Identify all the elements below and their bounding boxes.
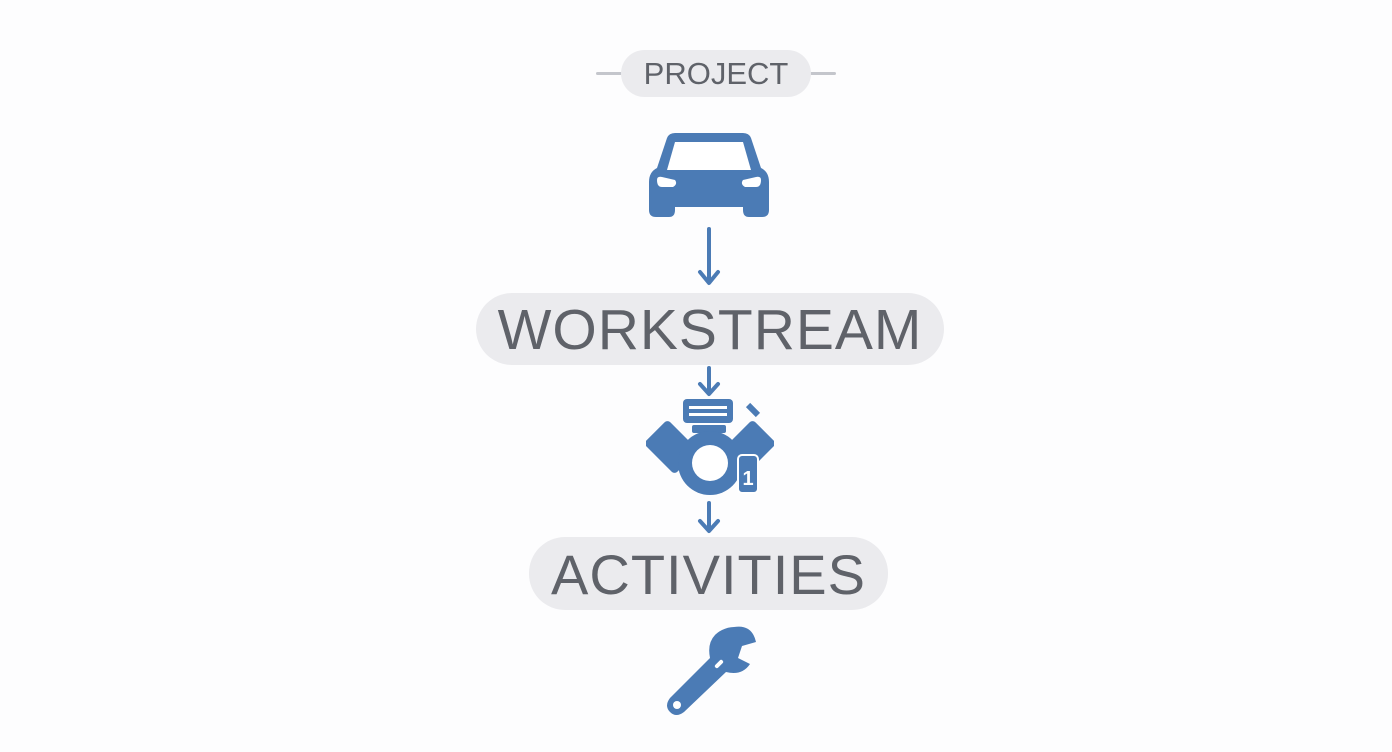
- icon: wrench: [667, 626, 756, 715]
- icon: engine: 1: [742, 468, 754, 490]
- title: PROJECT pill: PROJECT: [644, 56, 788, 91]
- icon: engine: [646, 399, 774, 495]
- arrow 3: [698, 501, 720, 534]
- title: PROJECT pill: [596, 50, 836, 97]
- heading: WORKSTREAM: WORKSTREAM: [498, 298, 922, 362]
- arrow 2: [698, 366, 720, 396]
- arrow 1: [698, 227, 720, 286]
- icon: car: [649, 133, 769, 217]
- heading: ACTIVITIES: ACTIVITIES: [551, 543, 866, 606]
